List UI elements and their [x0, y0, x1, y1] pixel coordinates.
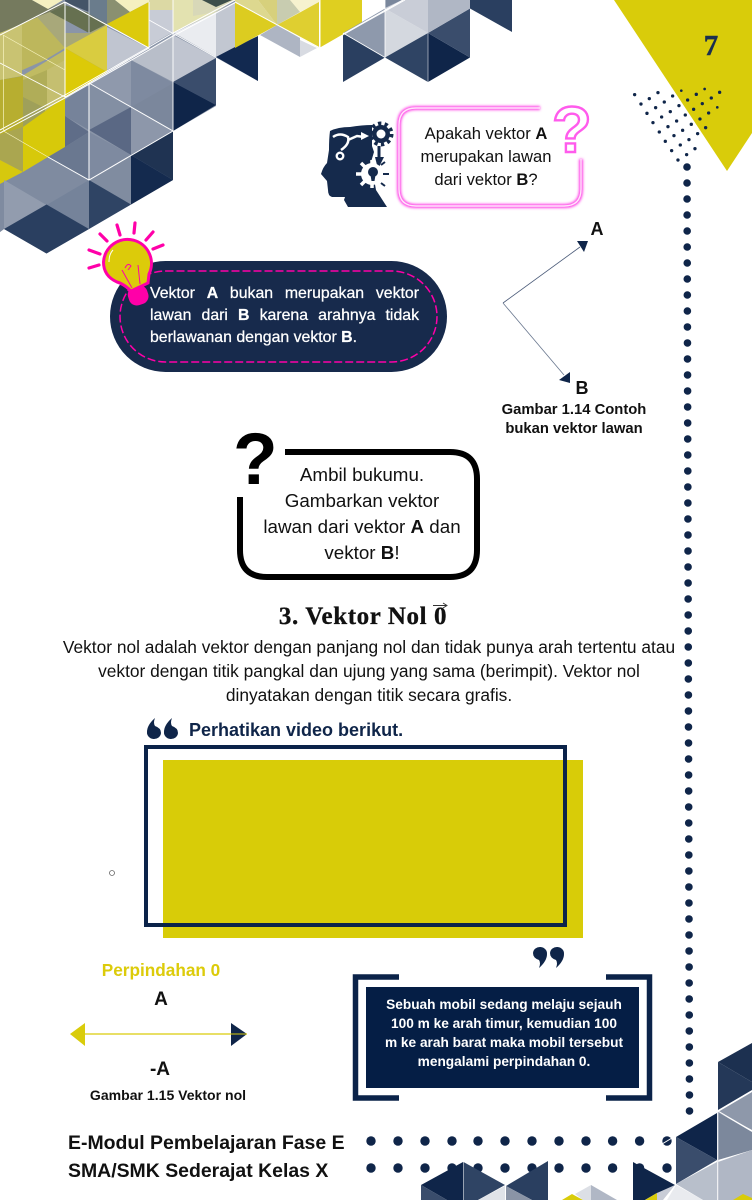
text: task: vektor B!	[324, 542, 400, 563]
text: question: dari vektor B?	[434, 170, 538, 189]
vertical dotted divider	[687, 167, 690, 1111]
text: question: Apakah vektor A	[425, 124, 547, 143]
label: A: A	[154, 989, 168, 1010]
caption: figure 1.14: Gambar 1.14 Contoh	[502, 402, 646, 418]
icon: neon question mark: ?	[552, 93, 592, 166]
decorative hexagon pattern: bottom right	[421, 1043, 752, 1200]
label: perpindahan 0: Perpindahan 0	[102, 960, 220, 980]
text: example	[385, 997, 623, 1069]
text: definition paragraph	[63, 637, 675, 705]
panel: bracket box	[356, 977, 650, 1098]
icon: head with gear and lightbulb	[321, 124, 392, 207]
text: definition paragraph: dinyatakan dengan titik secara grafis.	[226, 685, 512, 705]
yellow corner triangle	[614, 0, 752, 171]
small marker circle	[110, 870, 114, 876]
text: answer: Vektor A bukan merupakan vektor lawan dari B karena arahnya tidak berlawanan dengan vektor B.	[150, 285, 419, 346]
caption: figure 1.14: bukan vektor lawan	[505, 421, 643, 437]
icon: closing quote marks	[533, 947, 564, 968]
decorative hexagon pattern: top left	[0, 0, 258, 254]
dotted halftone pattern	[633, 88, 721, 162]
heading: section 3: 0	[434, 603, 447, 630]
footer text: E-Modul Pembelajaran Fase E	[68, 1132, 345, 1154]
text: question	[420, 124, 551, 189]
caption: figure 1.14	[502, 402, 646, 437]
footer text	[68, 1132, 345, 1182]
footer text: SMA/SMK Sederajat Kelas X	[68, 1160, 328, 1182]
text: question: merupakan lawan	[420, 147, 551, 166]
icon: big question mark: ?	[233, 419, 278, 500]
text: video prompt: Perhatikan video berikut.	[189, 720, 403, 740]
text: task: Ambil bukumu.	[300, 464, 424, 485]
chart: zero vector diagram	[70, 1023, 247, 1046]
text: task: Gambarkan vektor	[285, 490, 439, 511]
heading: section 3: 3. Vektor Nol	[279, 603, 427, 630]
panel: answer pill	[110, 261, 447, 372]
label: -A: -A	[150, 1059, 170, 1080]
text: example: m ke arah barat maka mobil tersebut	[385, 1035, 623, 1050]
text: definition paragraph: vektor dengan titik pangkal dan ujung yang sama (berimpit). Vektor nol	[98, 661, 640, 681]
decorative hexagon pattern: top centre	[235, 0, 512, 82]
chart: opposite vector diagram A and B	[503, 241, 588, 383]
icon: lightbulb	[89, 223, 163, 308]
panel: neon question frame	[399, 93, 592, 206]
text: example: mengalami perpindahan 0.	[418, 1054, 590, 1069]
text: example: 100 m ke arah timur, kemudian 100	[391, 1016, 617, 1031]
video panel: yellow block and frame	[146, 747, 583, 938]
label: vector B: B	[576, 378, 588, 398]
caption: figure 1.15: Gambar 1.15 Vektor nol	[90, 1087, 246, 1103]
text: task	[263, 464, 461, 563]
text: definition paragraph: Vektor nol adalah vektor dengan panjang nol dan tidak punya arah tertentu atau	[63, 637, 675, 657]
label: vector A: A	[590, 219, 604, 239]
icon: opening quote marks	[147, 718, 178, 739]
text: task: lawan dari vektor A dan	[263, 516, 461, 537]
footer dotted rows	[366, 1136, 672, 1173]
text: example: Sebuah mobil sedang melaju sejauh	[386, 997, 622, 1012]
page number: 7	[704, 30, 718, 62]
panel: task box	[233, 419, 477, 577]
